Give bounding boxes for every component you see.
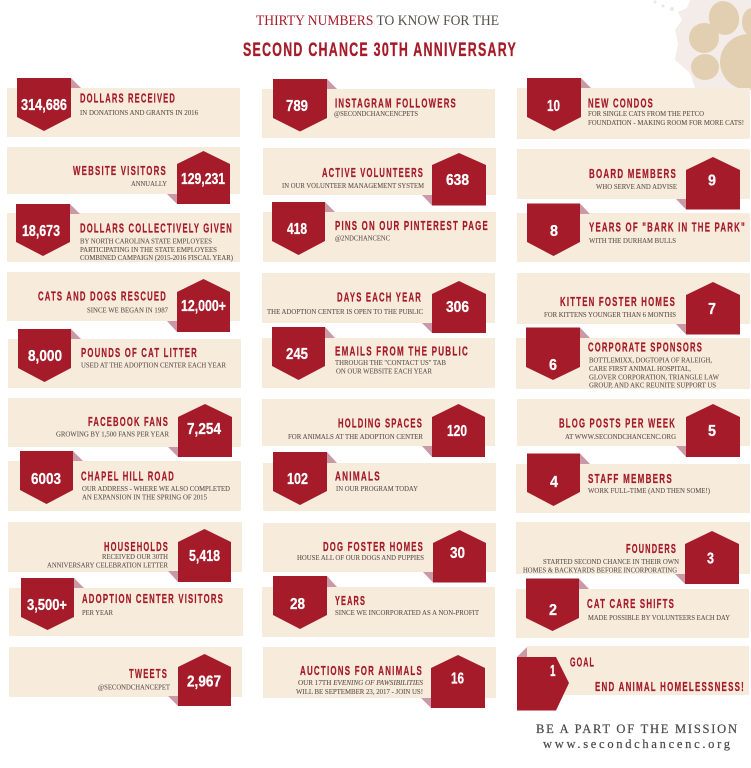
badge [178, 654, 231, 706]
panel: 5 blog posts per week [517, 399, 750, 457]
badge [273, 79, 327, 132]
badge [432, 153, 486, 206]
description: ANNUALLY [131, 179, 167, 188]
description [47, 552, 169, 570]
number: 1 [550, 663, 556, 680]
description [588, 109, 744, 127]
heading: KITTEN FOSTER HOMES [560, 294, 676, 309]
badge [177, 151, 230, 204]
number: 12,000+ [181, 298, 226, 315]
badge [178, 404, 232, 457]
heading: HOLDING SPACES [338, 416, 423, 430]
number: 5,418 [189, 548, 220, 565]
heading: ACTIVE VOLUNTEERS [322, 165, 424, 180]
heading: TWEETS [129, 666, 168, 681]
panel: 8 years of bark in the park [517, 204, 750, 262]
heading: STAFF MEMBERS [588, 471, 673, 486]
description: RECEIVED OUR 30TH [102, 552, 168, 561]
heading: NEW CONDOS [588, 96, 654, 110]
description: FOR ANIMALS AT THE ADOPTION CENTER [288, 432, 424, 441]
badge [685, 531, 739, 584]
description: GROUP, AND AKC REUNITE SUPPORT US [589, 381, 716, 390]
description: THROUGH THE "CONTACT US" TAB [335, 358, 446, 367]
badge [527, 204, 580, 256]
number: 314,686 [21, 97, 67, 114]
heading: EMAILS FROM THE PUBLIC [335, 344, 469, 358]
panel: 638 active volunteers [263, 148, 496, 206]
number: 418 [287, 221, 307, 238]
description: OUR ADDRESS - WHERE WE ALSO COMPLETED [82, 484, 230, 493]
description: ANNIVERSARY CELEBRATION LETTER [47, 560, 169, 570]
title line 2: SECOND CHANCE 30TH ANNIVERSARY [243, 39, 517, 61]
panel: 102 animals [263, 452, 496, 511]
number: 638 [446, 172, 469, 189]
description [296, 678, 423, 696]
badge [686, 404, 740, 457]
heading: CATS AND DOGS RESCUED [38, 288, 167, 304]
number: 4 [550, 474, 558, 491]
panel: 9 board members [517, 149, 750, 210]
number: 2 [549, 602, 557, 619]
heading: WEBSITE VISITORS [73, 163, 167, 178]
description: WILL BE SEPTEMBER 23, 2017 - JOIN US! [296, 687, 423, 696]
number: 120 [447, 423, 467, 440]
description: IN DONATIONS AND GRANTS IN 2016 [80, 108, 198, 117]
panel: 418 pins on our pinterest page [263, 202, 496, 262]
description: FOR KITTENS YOUNGER THAN 6 MONTHS [544, 310, 676, 319]
badge [526, 578, 579, 631]
description: WITH THE DURHAM BULLS [589, 236, 676, 245]
description: OUR 17TH EVENING OF PAWSIBILITIES [298, 678, 423, 687]
badge [21, 578, 74, 630]
number: 3 [707, 550, 714, 568]
description: CARE FIRST ANIMAL HOSPITAL, [589, 364, 691, 373]
description: WORK FULL-TIME (AND THEN SOME!) [588, 486, 710, 495]
description: AT WWW.SECONDCHANCENC.ORG [565, 432, 676, 441]
heading: DOLLARS RECEIVED [80, 90, 176, 106]
heading: INSTAGRAM FOLLOWERS [335, 96, 457, 110]
description: IN OUR PROGRAM TODAY [336, 484, 418, 493]
heading: DOG FOSTER HOMES [323, 539, 424, 554]
number: 7,254 [187, 421, 221, 438]
panel: 3 founders [516, 522, 750, 584]
description: HOMES & BACKYARDS BEFORE INCORPORATING [523, 565, 677, 574]
badge [686, 157, 740, 210]
number: 6003 [31, 471, 61, 488]
number: 8,000 [28, 348, 62, 365]
panel: 2,967 tweets [9, 647, 242, 706]
heading: PINS ON OUR PINTEREST PAGE [335, 218, 489, 233]
badge [272, 327, 325, 380]
badge [272, 202, 325, 255]
number: 10 [547, 98, 560, 115]
number: 16 [451, 670, 464, 688]
description: BY NORTH CAROLINA STATE EMPLOYEES [80, 236, 212, 246]
panel: 314,686 dollars received [7, 78, 240, 137]
heading: YEARS [335, 593, 366, 608]
description: SINCE WE BEGAN IN 1987 [87, 306, 168, 314]
panel: 28 years [262, 576, 495, 637]
description [82, 484, 230, 502]
panel: 30 dog foster homes [263, 523, 496, 582]
number: 18,673 [22, 223, 60, 240]
heading: HOUSEHOLDS [104, 539, 169, 554]
description: GROWING BY 1,500 FANS PER YEAR [56, 430, 170, 438]
description [589, 356, 720, 390]
panel: 10 new condos [517, 78, 750, 139]
heading: ADOPTION CENTER VISITORS [82, 591, 224, 606]
number: 789 [286, 98, 308, 115]
number: 28 [290, 596, 305, 613]
number: 6 [549, 357, 557, 374]
badge [527, 454, 580, 506]
description: THE ADOPTION CENTER IS OPEN TO THE PUBLIC [267, 307, 423, 316]
panel: 16 auctions for animals [263, 647, 496, 708]
badge [431, 655, 485, 708]
heading: FOUNDERS [626, 541, 677, 556]
panel: 4 staff members [516, 454, 750, 513]
panel: 789 instagram followers [262, 79, 495, 138]
description: ON OUR WEBSITE EACH YEAR [336, 366, 433, 376]
badge [432, 404, 485, 457]
heading: AUCTIONS FOR ANIMALS [300, 663, 423, 678]
badge [432, 281, 486, 333]
heading: POUNDS OF CAT LITTER [81, 345, 198, 360]
title line 1: THIRTY NUMBERS TO KNOW FOR THE [256, 13, 499, 29]
description: USED AT THE ADOPTION CENTER EACH YEAR [81, 360, 227, 370]
badge [527, 78, 581, 131]
panel: 5,418 households [8, 522, 242, 582]
badge [16, 204, 70, 256]
number: 245 [286, 346, 308, 363]
description [80, 236, 233, 262]
description: HOUSE ALL OF OUR DOGS AND PUPPIES [297, 553, 424, 562]
description: STARTED SECOND CHANCE IN THEIR OWN [543, 557, 679, 566]
panel: 306 days each year [262, 273, 495, 333]
description: SINCE WE INCORPORATED AS A NON-PROFIT [335, 608, 479, 617]
heading: BLOG POSTS PER WEEK [559, 416, 676, 430]
description: COMBINED CAMPAIGN (2015-2016 FISCAL YEAR) [80, 253, 233, 262]
number: 2,967 [187, 674, 221, 690]
badge [178, 529, 231, 582]
panel: 12,000+ cats and dogs rescued [7, 272, 240, 332]
badge [273, 452, 327, 505]
description: PARTICIPATING IN THE STATE EMPLOYEES [80, 245, 217, 254]
badge [20, 451, 73, 504]
heading: CHAPEL HILL ROAD [81, 468, 175, 484]
panel: 2 cat care shifts [516, 578, 749, 638]
panel: 8,000 pounds of cat litter [8, 329, 241, 388]
footer website: www.secondchancenc.org [543, 737, 731, 751]
panel: 18,673 dollars collectively given [7, 204, 240, 262]
description [335, 358, 446, 376]
panel: 245 emails from the public [262, 327, 495, 388]
icon: paw print [654, 0, 751, 90]
description: IN OUR VOLUNTEER MANAGEMENT SYSTEM [282, 181, 424, 190]
badge [273, 576, 327, 629]
description: MADE POSSIBLE BY VOLUNTEERS EACH DAY [588, 613, 730, 622]
badge [526, 328, 580, 380]
heading: FACEBOOK FANS [88, 414, 169, 429]
panel: 7 kitten foster homes [517, 273, 750, 334]
panel: 1 goal [517, 646, 749, 710]
number: 5 [708, 423, 716, 440]
panel: 6003 chapel hill road [8, 451, 241, 511]
description: WHO SERVE AND ADVISE [596, 182, 677, 191]
number: 102 [287, 471, 308, 488]
panel: 120 holding spaces [262, 399, 495, 457]
heading: ANIMALS [335, 468, 381, 484]
badge [177, 279, 230, 332]
heading: DOLLARS COLLECTIVELY GIVEN [80, 220, 233, 236]
badge [433, 530, 486, 582]
number: 129,231 [181, 171, 225, 188]
panel: 129,231 website visitors [7, 147, 240, 204]
description: PER YEAR [82, 608, 114, 617]
description: AN EXPANSION IN THE SPRING OF 2015 [82, 492, 207, 502]
footer call to action: BE A PART OF THE MISSION [536, 722, 737, 736]
panel: 7,254 facebook fans [8, 398, 241, 457]
number: 7 [708, 301, 716, 318]
number: 3,500+ [27, 597, 67, 614]
number: 306 [446, 299, 469, 316]
heading: BOARD MEMBERS [589, 166, 677, 181]
description: @SECONDCHANCENCPETS [334, 109, 418, 118]
panel: 3,500+ adoption center visitors [9, 578, 243, 636]
heading: CAT CARE SHIFTS [587, 596, 675, 611]
number: 9 [708, 172, 716, 190]
badge [18, 329, 71, 382]
description [523, 557, 679, 574]
badge [17, 78, 71, 131]
badge [686, 282, 740, 334]
description: GLOVER CORPORATION, TRIANGLE LAW [589, 372, 720, 381]
number: 8 [550, 223, 558, 240]
panel: 6 corporate sponsors [516, 328, 750, 390]
heading: DAYS EACH YEAR [337, 290, 422, 304]
badge [517, 657, 569, 710]
description: @SECONDCHANCEPET [98, 682, 170, 692]
number: 30 [450, 545, 465, 562]
description: @2NDCHANCENC [335, 234, 390, 242]
description: FOR SINGLE CATS FROM THE PETCO [588, 109, 704, 118]
heading: GOAL [570, 654, 595, 670]
description: BOTTLEMIXX, DOGTOPIA OF RALEIGH, [589, 356, 712, 364]
